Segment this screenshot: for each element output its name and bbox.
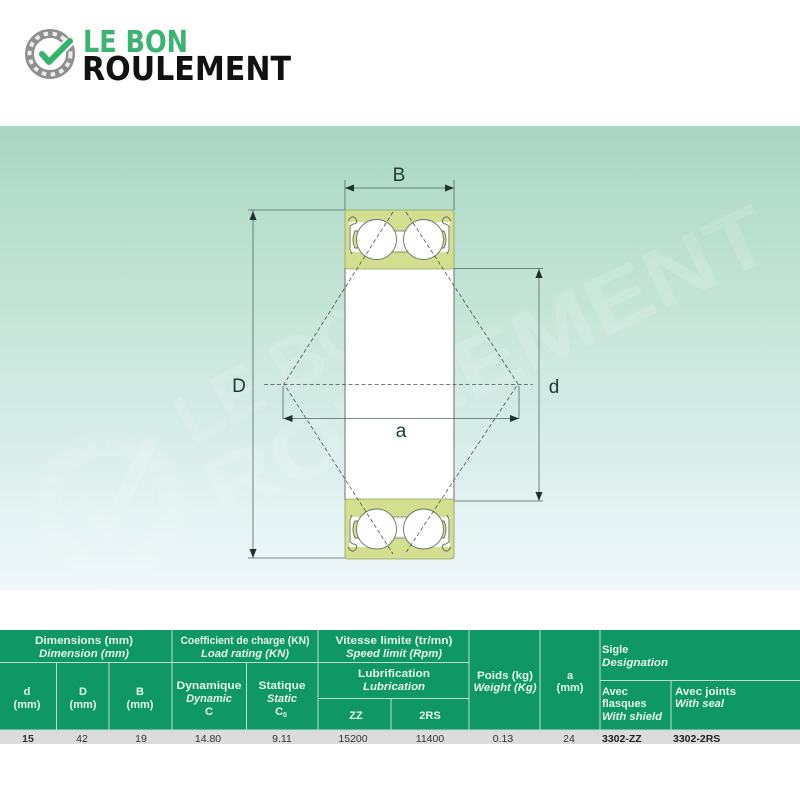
header: D: D bbox=[79, 686, 87, 698]
header: with seal bbox=[675, 686, 736, 710]
header: with seal: Avec joints bbox=[675, 686, 736, 698]
header: designation: Sigle bbox=[602, 644, 628, 656]
data row: 0.13 bbox=[493, 733, 513, 745]
watermark: logo and name: LE BON bbox=[161, 263, 432, 461]
dimension B bbox=[345, 165, 454, 210]
header: dynamic: C bbox=[205, 706, 213, 718]
header: D: (mm) bbox=[70, 699, 97, 711]
header: with shield bbox=[602, 686, 662, 723]
watermark: logo and name bbox=[48, 187, 785, 567]
icon: bearing with check mark bbox=[30, 34, 70, 74]
header: B: B bbox=[136, 686, 144, 698]
data row: 15 bbox=[22, 733, 34, 745]
bottom bearing section bbox=[345, 499, 454, 559]
data row bbox=[22, 733, 720, 745]
header: d: d bbox=[24, 686, 30, 698]
table header background bbox=[0, 630, 800, 730]
header: with shield: Avec bbox=[602, 686, 628, 698]
bearing bore (white centre) bbox=[345, 268, 454, 500]
dimension D bbox=[232, 210, 345, 558]
header: lubrication bbox=[358, 668, 430, 693]
dimension D: D bbox=[232, 376, 246, 397]
table data row background bbox=[0, 730, 800, 744]
data row: 19 bbox=[135, 733, 147, 745]
header: static: Statique bbox=[258, 680, 306, 692]
header: static: Static bbox=[267, 693, 297, 705]
header: static bbox=[258, 680, 306, 719]
header: weight bbox=[474, 670, 537, 694]
data row: 42 bbox=[76, 733, 88, 745]
header: static: 0 bbox=[283, 712, 287, 719]
header: lubrication: Lubrification bbox=[358, 668, 430, 680]
header: dimensions: Dimension (mm) bbox=[39, 648, 129, 660]
dimension d bbox=[454, 268, 559, 501]
header: 2RS: 2RS bbox=[419, 710, 441, 722]
dimension B: B bbox=[393, 165, 405, 186]
header: speed limit bbox=[336, 635, 453, 660]
dimension a bbox=[283, 386, 519, 442]
header: speed limit: Vitesse limite (tr/mn) bbox=[336, 635, 453, 647]
header: designation: Designation bbox=[602, 657, 668, 669]
header: load rating: Coefficient de charge (KN) bbox=[180, 635, 310, 647]
header: dynamic: Dynamique bbox=[176, 680, 242, 692]
header: static: C bbox=[275, 706, 283, 718]
header: load rating bbox=[180, 635, 310, 660]
header: with seal: With seal bbox=[675, 698, 725, 710]
header: D bbox=[70, 686, 97, 711]
specification table bbox=[0, 630, 800, 745]
header: with shield: With shield bbox=[602, 711, 662, 723]
data row: 14.80 bbox=[195, 733, 221, 745]
header: a bbox=[557, 670, 584, 694]
header: weight: Poids (kg) bbox=[477, 670, 533, 682]
data row: 9.11 bbox=[272, 733, 292, 745]
header: B bbox=[127, 686, 154, 711]
header: weight: Weight (Kg) bbox=[474, 682, 537, 694]
header: dimensions: Dimensions (mm) bbox=[35, 635, 133, 647]
data row: 3302-ZZ bbox=[602, 733, 642, 745]
data row: 11400 bbox=[416, 733, 444, 745]
header: load rating: Load rating (KN) bbox=[201, 648, 289, 660]
header: dimensions bbox=[35, 635, 133, 660]
logo text: ROULEMENT: ROULEMENT bbox=[82, 49, 291, 88]
top bearing section bbox=[345, 210, 454, 269]
header: dynamic: Dynamic bbox=[186, 693, 232, 705]
header: B: (mm) bbox=[127, 699, 154, 711]
header: with shield: flasques bbox=[602, 698, 647, 710]
header: ZZ: ZZ bbox=[349, 710, 363, 722]
panel: bearing diagram background bbox=[0, 126, 800, 590]
data row: 15200 bbox=[338, 733, 368, 745]
header: a: a bbox=[567, 670, 574, 682]
data row: 3302-2RS bbox=[673, 733, 720, 745]
header: lubrication: Lubrication bbox=[363, 681, 425, 693]
header: a: (mm) bbox=[557, 682, 584, 694]
data row: 24 bbox=[563, 733, 575, 745]
dimension d: d bbox=[549, 377, 559, 398]
bearing cross-section bbox=[345, 210, 454, 559]
contact angle dashed lines bbox=[264, 212, 533, 554]
header: d: (mm) bbox=[14, 699, 41, 711]
watermark: logo and name: ROULEMENT bbox=[189, 187, 785, 536]
logo bbox=[30, 25, 291, 88]
logo text: LE BON: LE BON bbox=[83, 25, 188, 60]
header: speed limit: Speed limit (Rpm) bbox=[346, 648, 442, 660]
header: d bbox=[14, 686, 41, 711]
dimension a: a bbox=[396, 421, 407, 442]
header: designation bbox=[602, 644, 668, 669]
header: dynamic bbox=[176, 680, 242, 718]
